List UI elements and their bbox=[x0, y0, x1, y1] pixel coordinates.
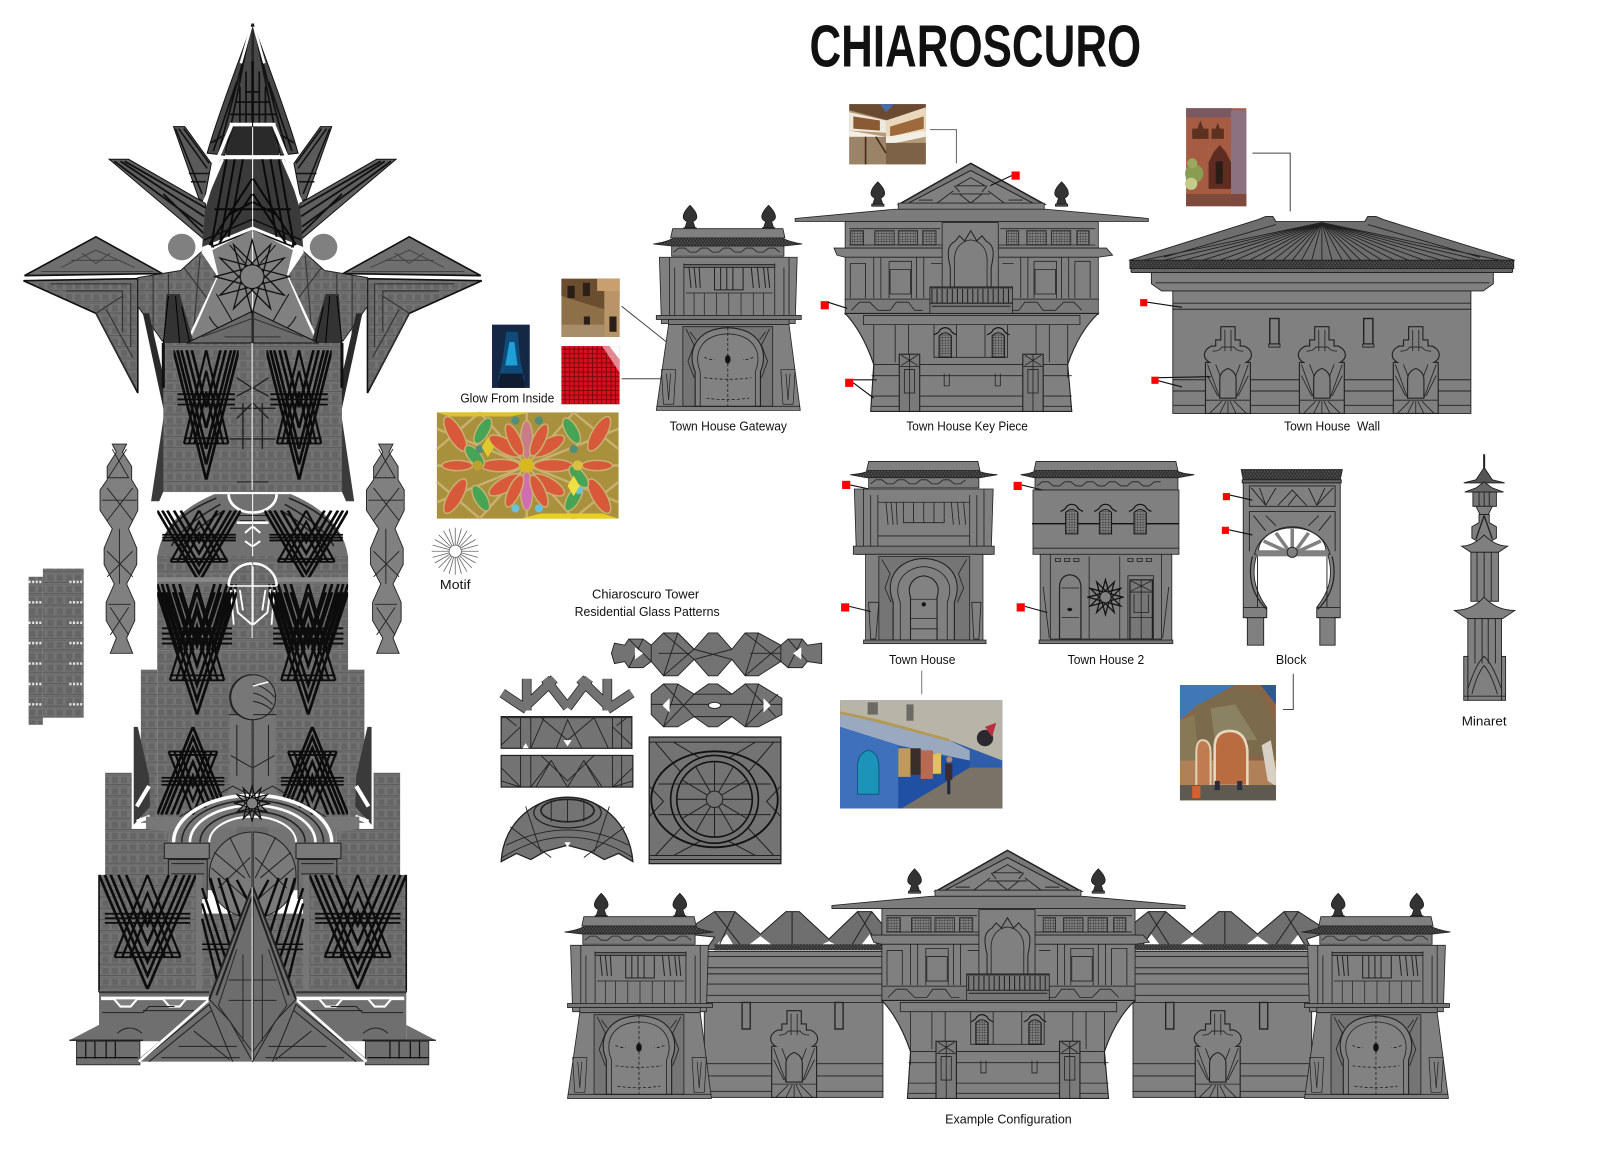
rosette star bbox=[215, 240, 289, 314]
heading: glass patterns: Residential Glass Patterns bbox=[575, 604, 720, 619]
callout markers: key piece bbox=[821, 172, 1020, 398]
motif bbox=[432, 528, 479, 575]
tower elevation bbox=[23, 23, 482, 1065]
town house bbox=[850, 461, 997, 644]
glass pattern: square wheel bbox=[649, 737, 781, 864]
title: CHIAROSCURO bbox=[809, 12, 1141, 79]
texture strip bbox=[29, 569, 84, 725]
roof zigzag left bbox=[696, 912, 882, 949]
town house key piece bbox=[795, 163, 1148, 411]
photo: glow from inside bbox=[492, 325, 530, 388]
key piece bbox=[832, 850, 1185, 1098]
connector line: wall bbox=[1252, 153, 1290, 211]
glass pattern: strip two bbox=[501, 755, 633, 787]
label: town house 2: Town House 2 bbox=[1068, 652, 1144, 667]
label: minaret: Minaret bbox=[1462, 713, 1507, 728]
glass pattern: zigzag bbox=[502, 679, 632, 711]
niches bbox=[771, 1011, 1241, 1097]
town house gateway bbox=[653, 205, 802, 410]
town house wall bbox=[1129, 216, 1515, 413]
photo: blue street bbox=[840, 700, 1002, 809]
connector lines: gateway photos bbox=[622, 306, 667, 379]
right gateway bbox=[1301, 893, 1450, 1098]
label: block: Block bbox=[1276, 652, 1307, 667]
connector line: town house bbox=[921, 671, 923, 694]
label: key piece: Town House Key Piece bbox=[906, 418, 1028, 433]
connector line: block bbox=[1283, 674, 1293, 709]
glass pattern: strip one bbox=[501, 717, 632, 748]
callout markers: wall bbox=[1140, 299, 1211, 387]
photo: red wall bbox=[1185, 108, 1246, 206]
stained glass panel bbox=[437, 412, 619, 519]
callout markers: town house 2 bbox=[1014, 482, 1047, 613]
photo: brown stone tower bbox=[561, 279, 620, 337]
tower lower star bbox=[235, 786, 270, 821]
label: example configuration: Example Configuration bbox=[945, 1111, 1072, 1126]
side ornament left bbox=[100, 444, 138, 653]
town house 2 bbox=[1021, 461, 1194, 644]
glass pattern: dome bbox=[501, 797, 633, 862]
connector line: key piece bbox=[930, 130, 956, 163]
glass pattern: short band bbox=[651, 684, 782, 727]
side ornament right bbox=[366, 444, 404, 653]
photo: courtyard bbox=[849, 104, 926, 164]
photo: red tile bbox=[561, 346, 620, 404]
block arch bbox=[1241, 470, 1342, 645]
heading: glass patterns: Chiaroscuro Tower bbox=[592, 587, 700, 602]
heading: glass patterns bbox=[575, 587, 720, 619]
callout markers: block bbox=[1222, 493, 1252, 535]
crest tiles bbox=[715, 944, 1307, 950]
left gateway bbox=[564, 893, 713, 1098]
label: wall: Town House Wall bbox=[1284, 418, 1380, 433]
example configuration bbox=[564, 850, 1450, 1098]
minaret bbox=[1455, 454, 1515, 700]
glass pattern: long band bbox=[611, 633, 822, 676]
wall sections bbox=[704, 951, 1312, 1097]
label: town house: Town House bbox=[889, 652, 955, 667]
photo: gate bbox=[1180, 685, 1276, 800]
label: gateway: Town House Gateway bbox=[670, 418, 787, 433]
callout markers: town house bbox=[841, 481, 871, 611]
label: glow from inside: Glow From Inside bbox=[460, 391, 554, 406]
roof zigzag right bbox=[1133, 912, 1319, 949]
label: motif: Motif bbox=[440, 577, 471, 592]
